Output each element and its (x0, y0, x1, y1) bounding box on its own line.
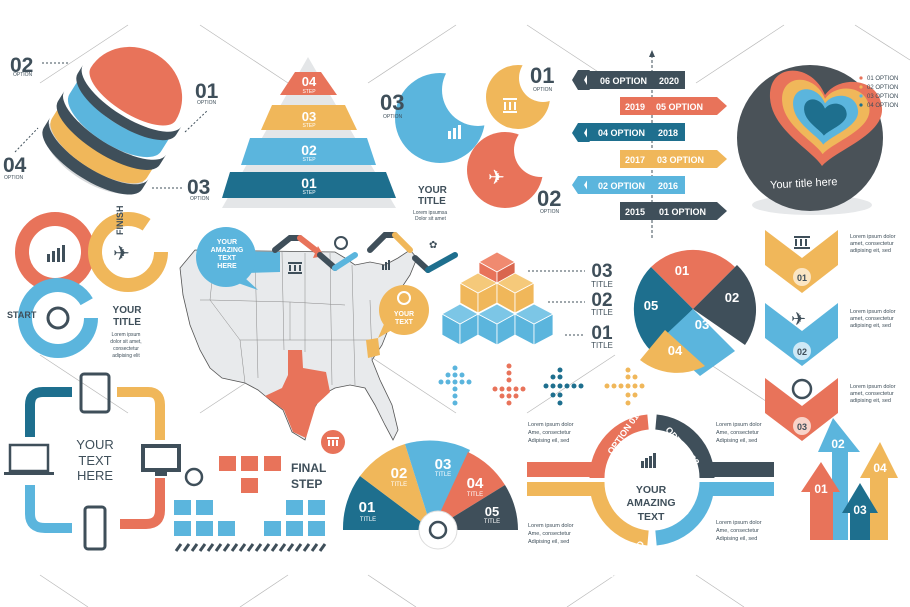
timeline: 03 OPTION (657, 155, 704, 165)
infinity loop: Lorem ipsum (112, 332, 140, 338)
ring lorem texts: Lorem ipsum dolor (528, 422, 574, 428)
infinity loop: ✈ (113, 243, 130, 265)
moons: OPTION (533, 87, 553, 93)
blocks final step (174, 456, 326, 551)
wave arrows (275, 235, 455, 270)
blocks final step: STEP (291, 477, 322, 491)
cube labels: 03 (591, 261, 613, 282)
pyramid: STEP (302, 123, 316, 129)
pie circle: 01 (675, 263, 689, 278)
infinity loop: TITLE (113, 317, 141, 328)
ring options: OPTION 02 (663, 425, 701, 467)
semi fan: TITLE (391, 482, 407, 488)
cube labels: 01 (591, 323, 613, 344)
sphere labels: OPTION (4, 175, 24, 181)
wave icons (288, 237, 437, 274)
infinity loop: YOUR (113, 305, 142, 316)
up arrows: 02 (831, 437, 845, 451)
US map (180, 250, 417, 440)
globe with heart: Your title here (770, 176, 838, 192)
moons: OPTION (383, 114, 403, 120)
cube labels: TITLE (591, 280, 613, 289)
infinity loop (7, 205, 161, 359)
ring options (527, 412, 774, 581)
timeline: 2020 (659, 76, 679, 86)
chevrons: 03 (797, 422, 807, 432)
chevron texts: Lorem ipsum dolor (850, 384, 896, 390)
pie circle: 05 (644, 298, 658, 313)
ring options: TEXT (638, 511, 665, 523)
chevron texts (850, 234, 896, 404)
map callouts: AMAZING (211, 247, 244, 254)
pyramid: 04 (302, 74, 317, 89)
devices cycle: HERE (77, 468, 113, 483)
semi fan (343, 441, 518, 549)
semi fan: 05 (485, 504, 499, 519)
timeline: 2016 (658, 181, 678, 191)
semi fan: TITLE (435, 472, 451, 478)
globe legend: 03 OPTION (867, 94, 898, 100)
pyramid: STEP (302, 190, 316, 196)
globe legend (859, 76, 898, 109)
sphere: stacked discs (29, 23, 208, 211)
infinity loop: START (7, 310, 37, 320)
ring options: AMAZING (626, 497, 676, 509)
ring options: OPTION 04 (608, 539, 646, 581)
cube labels: 02 (591, 290, 613, 311)
cube labels (528, 261, 613, 350)
map callouts: TEXT (218, 255, 237, 262)
moons: OPTION (540, 209, 560, 215)
moons: 02 (537, 186, 561, 211)
up arrows: 01 (814, 482, 828, 496)
ring options: OPTION 01 (605, 412, 641, 456)
moons: Dolor sit amet (415, 216, 446, 222)
chevron texts: adipising eit, sed (850, 398, 891, 404)
semi fan: 01 (359, 499, 375, 516)
ring lorem texts: Lorem ipsum dolor (716, 422, 762, 428)
devices cycle (4, 374, 179, 549)
ring lorem texts: Ame, consectetur (528, 531, 571, 537)
pie circle: 04 (668, 343, 683, 358)
chevrons: ✈ (791, 309, 806, 329)
sphere labels: OPTION (190, 196, 210, 202)
semi fan: TITLE (360, 517, 376, 523)
chevron texts: Lorem ipsum dolor (850, 309, 896, 315)
devices cycle: TEXT (78, 453, 112, 468)
sphere labels: OPTION (197, 100, 217, 106)
ring lorem texts (528, 422, 762, 545)
pie circle (634, 250, 756, 376)
moons (380, 63, 561, 222)
chevron texts: amet, consectetur (850, 316, 894, 322)
ring lorem texts: Ame, consectetur (716, 528, 759, 534)
ring options: OPTION 03 (656, 473, 692, 518)
sphere labels: OPTION (13, 72, 33, 78)
pyramid (222, 57, 396, 208)
sphere labels: 02 (10, 54, 33, 77)
cubes (442, 252, 553, 345)
ring lorem texts: Ame, consectetur (716, 430, 759, 436)
sphere labels: 04 (3, 154, 27, 177)
moons: YOUR (418, 185, 448, 196)
pie circle: 03 (695, 317, 709, 332)
timeline: 2018 (658, 128, 678, 138)
pie circle: 02 (725, 290, 739, 305)
semi fan: TITLE (467, 492, 483, 498)
timeline: 2017 (625, 155, 645, 165)
timeline: 05 OPTION (656, 102, 703, 112)
moons: ✈ (488, 167, 505, 189)
pyramid: STEP (302, 157, 316, 163)
infinity loop: dolor sit amet, (110, 339, 142, 345)
timeline: 04 OPTION (598, 128, 645, 138)
timeline: 01 OPTION (659, 207, 706, 217)
ring lorem texts: Ame, consectetur (528, 430, 571, 436)
wave icons: ✿ (429, 240, 437, 251)
moons: Lorem ipsumsa (413, 210, 447, 216)
ring lorem texts: Adipising eil, sed (716, 536, 757, 542)
sphere labels: 03 (187, 176, 210, 199)
ring lorem texts: Adipising eil, sed (528, 539, 569, 545)
semi fan: 02 (391, 465, 407, 482)
pyramid: STEP (302, 89, 316, 95)
timeline: 2015 (625, 207, 645, 217)
map callouts: TEXT (395, 319, 414, 326)
infinity loop: FINISH (115, 205, 125, 235)
chevron texts: Lorem ipsum dolor (850, 234, 896, 240)
chevron texts: amet, consectetur (850, 241, 894, 247)
blocks final step: FINAL (291, 461, 326, 475)
sphere labels (3, 54, 219, 202)
up arrows: 03 (853, 503, 867, 517)
globe legend: 04 OPTION (867, 103, 898, 109)
infinity loop: consectetur (113, 346, 139, 352)
map callouts: YOUR (217, 239, 237, 246)
cube labels: TITLE (591, 308, 613, 317)
dotted arrows (438, 364, 644, 406)
chevron texts: adipising eit, sed (850, 248, 891, 254)
globe with heart (737, 65, 883, 215)
semi fan: 03 (435, 456, 451, 473)
ring options: YOUR (636, 484, 667, 496)
infinity loop: adipising elit (112, 353, 140, 359)
chevrons: 01 (797, 273, 807, 283)
map callouts: YOUR (394, 311, 414, 318)
chevron texts: adipising eit, sed (850, 323, 891, 329)
ring lorem texts: Lorem ipsum dolor (528, 523, 574, 529)
timeline: 02 OPTION (598, 181, 645, 191)
timeline: 06 OPTION (600, 76, 647, 86)
devices cycle: YOUR (76, 437, 114, 452)
semi fan: TITLE (484, 519, 500, 525)
pyramid: 02 (301, 142, 317, 158)
map callouts (196, 227, 429, 454)
globe legend: 01 OPTION (867, 76, 898, 82)
timeline: 2019 (625, 102, 645, 112)
ring lorem texts: Lorem ipsum dolor (716, 520, 762, 526)
timeline (572, 50, 727, 240)
pyramid: 03 (302, 109, 316, 124)
cube labels: TITLE (591, 341, 613, 350)
up arrows (801, 418, 898, 540)
pyramid: 01 (301, 175, 317, 191)
map callouts: HERE (217, 263, 237, 270)
sphere labels: 01 (195, 80, 219, 103)
chevrons: 02 (797, 347, 807, 357)
up arrows: 04 (873, 461, 887, 475)
moons: 01 (530, 63, 554, 88)
ring lorem texts: Adipising eil, sed (716, 438, 757, 444)
ring lorem texts: Adipising eil, sed (528, 438, 569, 444)
chevron texts: amet, consectetur (850, 391, 894, 397)
semi fan: 04 (467, 475, 484, 492)
chevrons (765, 230, 838, 441)
globe legend: 02 OPTION (867, 85, 898, 91)
moons: TITLE (418, 196, 446, 207)
moons: 03 (380, 90, 404, 115)
